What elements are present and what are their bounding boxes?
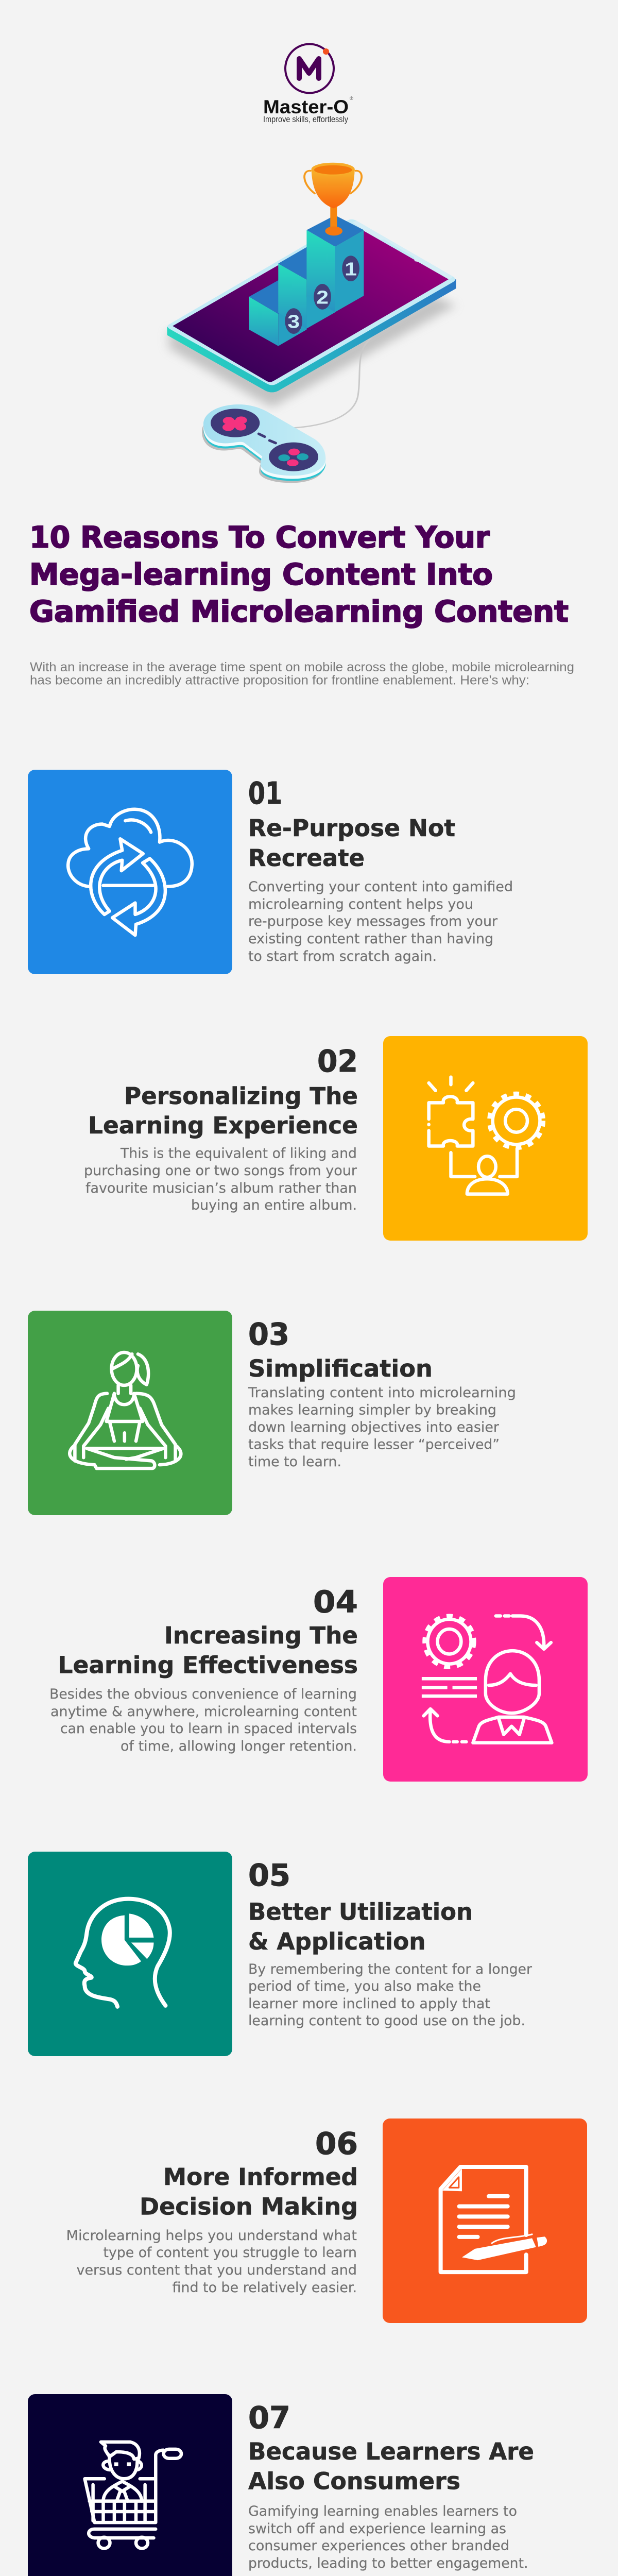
panel: reason 04 — [49, 1577, 588, 1782]
title — [29, 520, 569, 629]
heading: Decision Making — [140, 2193, 358, 2221]
number: 04 — [313, 1584, 358, 1620]
heading — [248, 2438, 534, 2495]
title: Gamified Microlearning Content — [29, 595, 569, 629]
podium: 3 — [287, 312, 300, 332]
body text: type of content you struggle to learn — [103, 2245, 357, 2261]
icon tile: shopping cart learner — [28, 2394, 232, 2576]
body text: Besides the obvious convenience of learning — [49, 1686, 357, 1702]
body text: anytime & anywhere, microlearning content — [50, 1704, 357, 1720]
number: 02 — [317, 1043, 358, 1079]
intro text: With an increase in the average time spent on mobile across the globe, mobile microlearning — [30, 660, 574, 674]
heading: Because Learners Are — [248, 2438, 534, 2465]
icon tile: cloud sync — [28, 770, 232, 974]
panel: reason 06 — [66, 2119, 587, 2323]
panel: reason 07 — [28, 2394, 534, 2576]
body text: favourite musician’s album rather than — [85, 1180, 357, 1196]
heading — [140, 2163, 358, 2221]
body text — [49, 1686, 357, 1754]
podium — [249, 215, 364, 346]
number: 05 — [248, 1857, 290, 1893]
number: 06 — [315, 2126, 358, 2161]
body text: down learning objectives into easier — [248, 1419, 500, 1435]
body text: existing content rather than having — [248, 931, 493, 947]
heading: Simplification — [248, 1355, 433, 1382]
game controller — [202, 404, 325, 483]
icon tile: puzzle and gear — [383, 1036, 588, 1241]
cable — [294, 338, 372, 428]
icon tile: person and gear cycle — [383, 1577, 588, 1782]
body text: Converting your content into gamified — [248, 879, 513, 895]
heading: Re-Purpose Not — [248, 815, 455, 842]
body text: Gamifying learning enables learners to — [248, 2503, 517, 2519]
body text: tasks that require lesser “perceived” — [248, 1436, 500, 1453]
body text: Translating content into microlearning — [248, 1385, 516, 1401]
body text: switch off and experience learning as — [248, 2521, 506, 2537]
heading: More Informed — [163, 2163, 358, 2191]
heading: Recreate — [248, 844, 365, 872]
number: 01 — [248, 775, 282, 811]
intro text — [30, 660, 574, 687]
icon tile: document and pen — [383, 2119, 587, 2323]
hero illustration: phone podium and trophy — [167, 163, 456, 428]
number: 03 — [248, 1316, 289, 1352]
body text — [248, 879, 513, 964]
heading: Learning Experience — [88, 1112, 358, 1139]
smartphone — [167, 219, 456, 393]
phone shadow — [169, 296, 455, 408]
podium: 2 — [316, 287, 329, 308]
body text: versus content that you understand and — [76, 2262, 357, 2278]
body text — [84, 1146, 357, 1213]
body text: time to learn. — [248, 1454, 341, 1470]
logo: Master-O: ® — [350, 96, 353, 101]
heading — [88, 1082, 358, 1139]
body text: makes learning simpler by breaking — [248, 1402, 496, 1418]
body text: Microlearning helps you understand what — [66, 2228, 357, 2244]
number: 07 — [248, 2400, 290, 2435]
body text: purchasing one or two songs from your — [84, 1163, 357, 1179]
logo: Master-O: Master-O — [263, 96, 349, 117]
body text — [248, 1385, 516, 1470]
body text: By remembering the content for a longer — [248, 1961, 533, 1977]
podium: 1 — [345, 259, 357, 280]
panel: reason 01 — [28, 770, 513, 974]
heading: Increasing The — [164, 1622, 358, 1649]
body text: period of time, you also make the — [248, 1978, 481, 1994]
title: 10 Reasons To Convert Your — [29, 520, 490, 554]
panel: reason 05 — [28, 1852, 533, 2056]
body text: of time, allowing longer retention. — [121, 1738, 357, 1754]
heading: Learning Effectiveness — [58, 1652, 358, 1679]
body text — [66, 2228, 357, 2296]
logo: Master-O: Improve skills, effortlessly — [263, 114, 348, 124]
logo: Master-O — [263, 44, 353, 124]
body text: to start from scratch again. — [248, 948, 437, 964]
body text: can enable you to learn in spaced intervals — [60, 1721, 357, 1737]
title: Mega-learning Content Into — [29, 557, 493, 591]
heading: Better Utilization — [248, 1898, 473, 1926]
icon tile: meditation — [28, 1311, 232, 1515]
body text: microlearning content helps you — [248, 896, 473, 912]
heading: & Application — [248, 1928, 425, 1955]
body text: learning content to good use on the job. — [248, 2013, 525, 2029]
body text: consumer experiences other branded — [248, 2538, 509, 2554]
body text: learner more inclined to apply that — [248, 1996, 490, 2012]
heading — [248, 815, 455, 872]
trophy — [304, 163, 362, 235]
icon tile: head with pie chart — [28, 1852, 232, 2056]
body text — [248, 1961, 533, 2029]
heading: Also Consumers — [248, 2468, 460, 2495]
body text — [248, 2503, 528, 2571]
heading: Personalizing The — [124, 1082, 358, 1110]
body text: products, leading to better engagement. — [248, 2555, 528, 2571]
body text: This is the equivalent of liking and — [120, 1146, 357, 1161]
heading — [58, 1622, 358, 1679]
body text: buying an entire album. — [191, 1197, 357, 1213]
panel: reason 02 — [84, 1036, 588, 1241]
intro text: has become an incredibly attractive proposition for frontline enablement. Here's why: — [30, 673, 529, 687]
panel: reason 03 — [28, 1311, 516, 1515]
body text: re-purpose key messages from your — [248, 913, 498, 929]
body text: find to be relatively easier. — [172, 2280, 357, 2296]
heading — [248, 1898, 473, 1955]
